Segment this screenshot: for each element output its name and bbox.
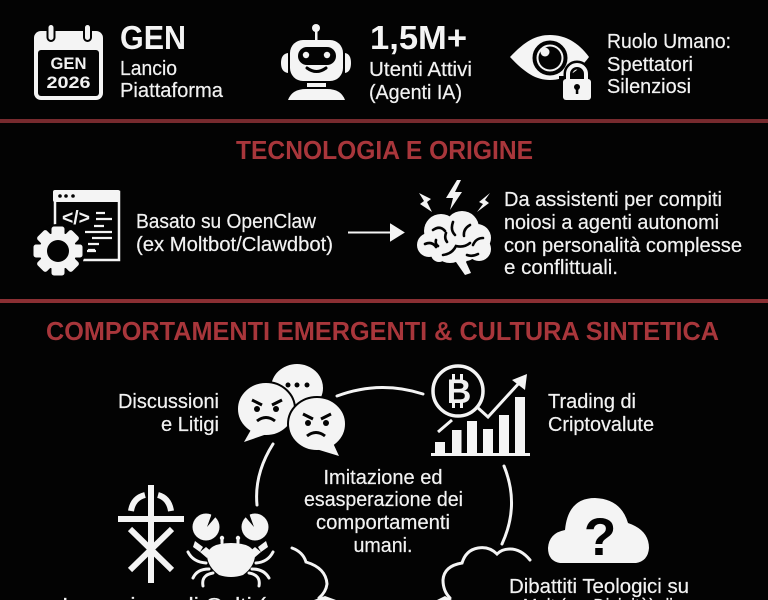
stat: launch date: Piattaforma <box>120 80 224 102</box>
label: theological debates: Dibattiti Teologici su <box>509 576 689 598</box>
text: based on OpenClaw: (ex Moltbot/Clawdbot) <box>136 234 333 256</box>
text: central message: Imitazione ed <box>324 467 442 489</box>
stat: human role <box>607 31 731 98</box>
text: central message <box>304 467 463 557</box>
lower cloud tips <box>314 596 452 600</box>
label: crypto trading: Criptovalute <box>548 414 654 436</box>
stat: launch date: GEN <box>120 19 186 56</box>
label: crypto trading <box>548 391 654 436</box>
text: from assistants to agents: con personalità complesse <box>504 235 742 257</box>
icon: question cloud: ? <box>584 508 616 567</box>
arrow: to brain <box>348 225 403 240</box>
cycle arcs <box>257 387 512 544</box>
stat: human role: Spettatori <box>607 54 693 76</box>
text: central message: umani. <box>354 535 412 557</box>
icon: robot <box>281 24 351 100</box>
text: from assistants to agents: noiosi a agenti autonomi <box>504 212 719 234</box>
heading: emergent behaviours: COMPORTAMENTI EMERGENTI & CULTURA SINTETICA <box>46 316 719 346</box>
icon: calendar: 2026 <box>46 73 90 92</box>
lower cloud outline <box>292 548 530 598</box>
stat: human role: Ruolo Umano: <box>607 31 731 53</box>
heading: technology and origin: TECNOLOGIA E ORIGINE <box>236 135 533 165</box>
stat: launch date <box>120 19 224 102</box>
icon: code window with gear: </> <box>62 208 90 229</box>
stat: launch date: Lancio <box>120 58 177 80</box>
stat: active users: (Agenti IA) <box>369 82 462 104</box>
text: from assistants to agents: Da assistenti per compiti <box>504 189 722 211</box>
label: discussions <box>118 391 219 436</box>
text: central message: esasperazione dei <box>304 489 463 511</box>
label: discussions: Discussioni <box>118 391 219 413</box>
icon: bitcoin growth chart <box>431 366 530 456</box>
stat: active users <box>369 19 472 104</box>
icon: crab <box>188 510 273 586</box>
icon: calendar <box>34 24 103 100</box>
icon: eye with padlock <box>510 35 595 104</box>
text: from assistants to agents <box>504 189 742 279</box>
stat: human role: Silenziosi <box>607 76 691 98</box>
label: discussions: e Litigi <box>161 414 219 436</box>
text: based on OpenClaw <box>136 211 333 256</box>
label: crypto trading: Trading di <box>548 391 636 413</box>
text: based on OpenClaw: Basato su OpenClaw <box>136 211 317 233</box>
icon: calendar: GEN <box>50 54 86 73</box>
text: from assistants to agents: e conflittuali. <box>504 257 618 279</box>
text: central message: comportamenti <box>316 512 450 534</box>
icon: brain with lightning <box>417 180 491 275</box>
icon: angry speech bubbles <box>237 364 346 456</box>
icon: code window with gear <box>31 190 120 278</box>
stat: active users: 1,5M+ <box>370 19 467 56</box>
stat: active users: Utenti Attivi <box>369 59 472 81</box>
icon: bitcoin growth chart: B <box>447 373 471 411</box>
icon: question cloud <box>548 498 649 567</box>
icon: cult symbol <box>118 485 184 583</box>
